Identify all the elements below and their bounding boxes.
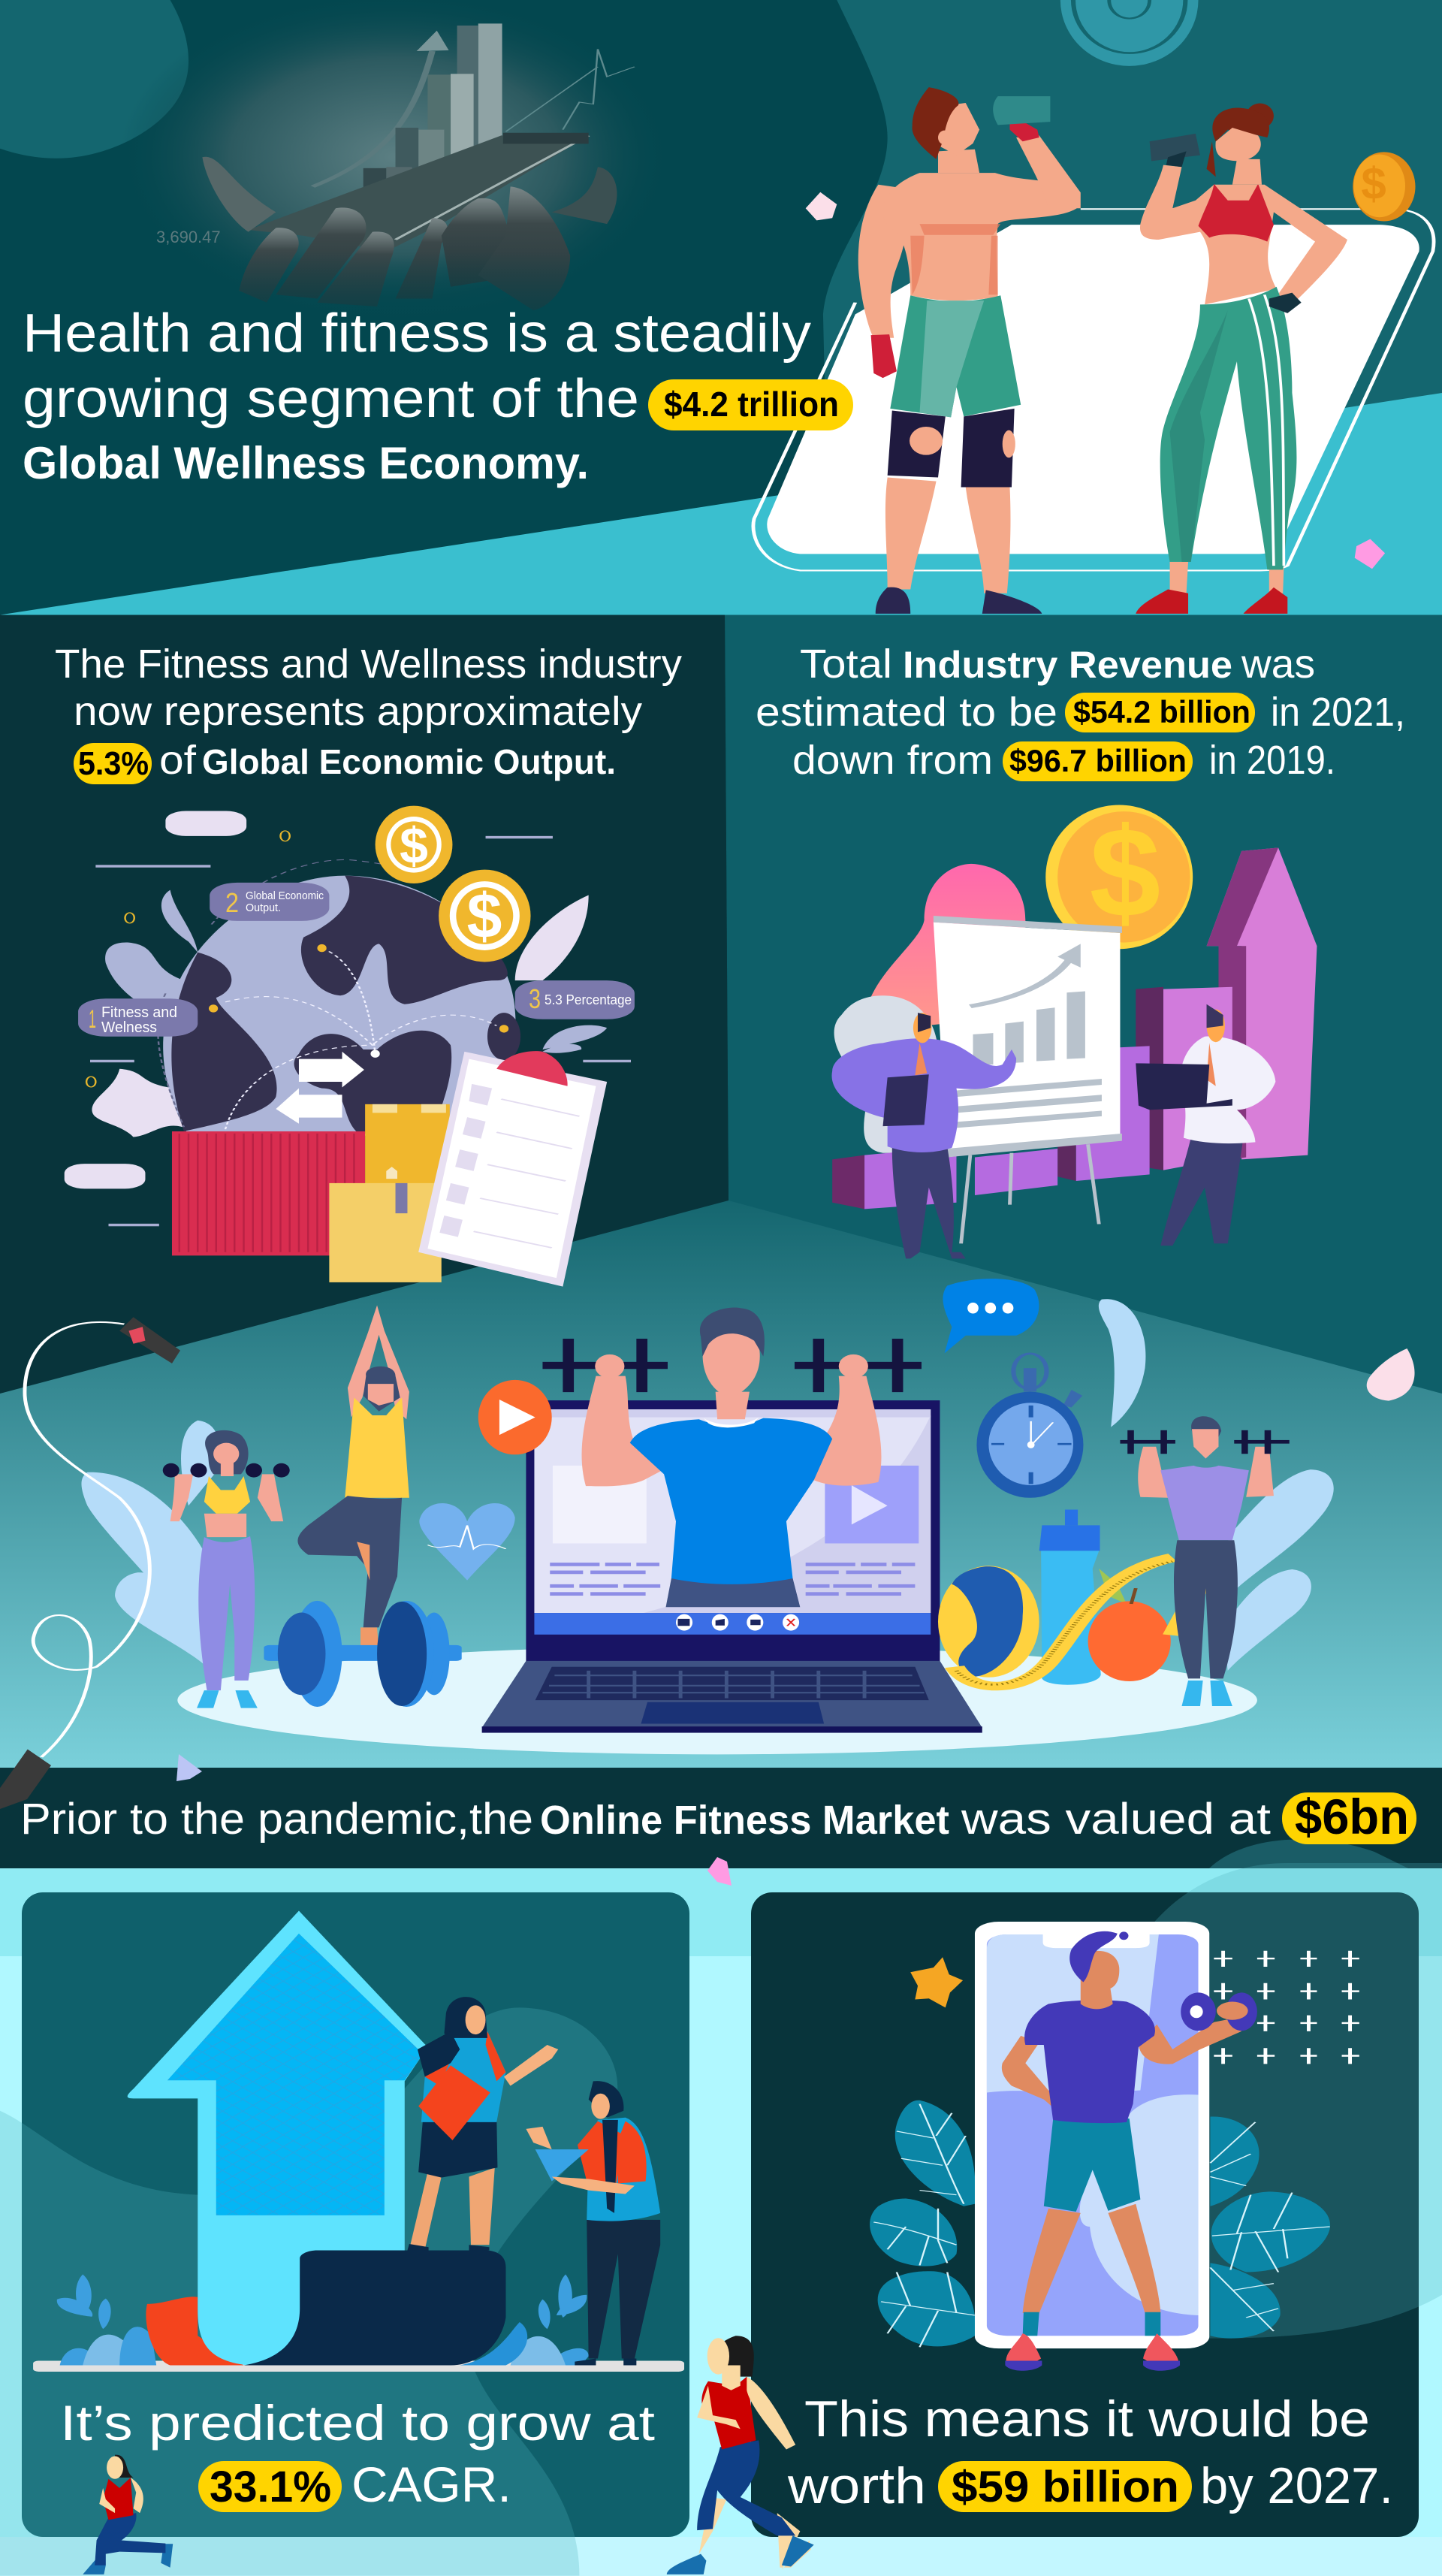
- leaf veins: [873, 2104, 1330, 2347]
- pink petal: [1367, 1348, 1415, 1401]
- value pill: 5.3%: 5.3%: [78, 745, 149, 782]
- dark teal leaves: [870, 2100, 1330, 2346]
- apple: [1088, 1569, 1171, 1681]
- left panel text: growth rate: CAGR.: [351, 2457, 511, 2512]
- pill label: fitness and wellness: Fitness and: [101, 1004, 177, 1021]
- large up arrow: [128, 1911, 427, 2366]
- pink blob: [864, 864, 1025, 1032]
- heading: global economic output: Global Economic Output.: [202, 742, 616, 781]
- cargo container: [172, 1131, 365, 1255]
- phone with athlete: [870, 1922, 1330, 2348]
- analyst with laptop: [1136, 1004, 1275, 1246]
- runner small: [83, 2455, 173, 2574]
- heading: industry revenue: was: [1241, 642, 1315, 687]
- rounded parallelogram backdrop: [753, 209, 1434, 570]
- man torso: [883, 173, 1081, 300]
- value pill: 4.2 trillion: [648, 379, 853, 430]
- man shorts: [890, 295, 1021, 417]
- woman body skin: [1140, 165, 1347, 304]
- band text: online fitness market: Online Fitness Market: [540, 1798, 949, 1843]
- left panel text: growth rate: It’s predicted to grow at: [60, 2395, 655, 2451]
- pill label: 5.3 percentage: 3: [529, 983, 541, 1014]
- pill label: global economic output: 2: [225, 887, 239, 918]
- growth illustration: [33, 1911, 1359, 2574]
- value pill: 33.1%: 33.1%: [210, 2463, 331, 2511]
- hero illustration group: [0, 0, 1442, 615]
- value pill: 6bn: $6bn: [1295, 1789, 1409, 1844]
- woman fingerless glove: [1269, 293, 1302, 313]
- pill label: fitness and wellness: [89, 1004, 177, 1036]
- man shoes: [876, 587, 1042, 614]
- right panel text: market value: worth: [787, 2457, 926, 2514]
- left panel text: growth rate: [60, 2395, 655, 2512]
- plus grid: [1214, 1951, 1359, 2064]
- dashed orbit: [158, 859, 382, 1127]
- red glove on raised hand: [1010, 114, 1039, 141]
- phone athlete: [1002, 1931, 1257, 2371]
- value pill: 96.7 billion: $96.7 billion: [1009, 743, 1187, 778]
- coin dollar signs: $: [400, 817, 428, 874]
- global output illustration: [65, 806, 635, 1287]
- right panel text: market value: This means it would be: [804, 2390, 1370, 2448]
- purple bars: [832, 987, 1232, 1209]
- hero heading: [23, 304, 853, 488]
- medicine ball: [938, 1566, 1039, 1678]
- man knee sleeves: [888, 409, 1015, 488]
- section background: top hero: [0, 0, 1442, 615]
- runner large: [667, 2336, 814, 2574]
- band text: online fitness market: Prior to the pandemic,the: [20, 1795, 533, 1844]
- man with laptop: [526, 2081, 660, 2366]
- revenue coin dollar sign: $: [1090, 802, 1160, 944]
- heading: industry revenue: Total: [800, 642, 892, 687]
- heading: industry revenue: down from: [792, 738, 993, 783]
- heading: industry revenue: in 2021,: [1271, 690, 1405, 735]
- woman with clipboard: [407, 1997, 558, 2250]
- value pill: 59 billion: $59 billion: [952, 2463, 1179, 2511]
- man raised forearm: [1016, 135, 1081, 208]
- woman feet and shins: [1170, 562, 1284, 593]
- man lower legs: [885, 477, 1010, 593]
- translucent overlay blobs: [0, 1863, 1442, 2576]
- heading: global economic output: now represents approximately: [74, 689, 642, 734]
- man abs shade: [910, 224, 1000, 294]
- water bottle: [1039, 1509, 1101, 1685]
- gold dollar coin: [1353, 152, 1416, 221]
- value pill: 54.2 billion: $54.2 billion: [1073, 694, 1250, 729]
- trainer t-shirt: [630, 1418, 832, 1584]
- decorative pills: [65, 811, 246, 1188]
- large gold coin: [1045, 805, 1193, 949]
- woman shoes: [1136, 587, 1287, 614]
- right leaf: [515, 895, 589, 980]
- online workout illustration: [0, 1279, 1415, 1810]
- stage ellipse: [177, 1646, 1257, 1754]
- value pill: 4.2 trillion: $4.2 trillion: [664, 385, 839, 424]
- label pills: [78, 883, 635, 1037]
- man drinking from bottle: [858, 87, 1081, 614]
- man left arm: [858, 185, 908, 338]
- clipboard checklist: [418, 1051, 607, 1287]
- heading: industry revenue: [756, 642, 1405, 783]
- trainer arms: [582, 1376, 881, 1486]
- trainer head: [716, 1392, 750, 1419]
- foliage cluster right: [460, 2275, 589, 2366]
- pill label: 5.3 percentage: 5.3 Percentage: [545, 992, 632, 1007]
- globe: [163, 876, 520, 1136]
- heading: global economic output: of: [159, 738, 197, 783]
- coin dollar signs: [400, 817, 502, 951]
- leaf sprig lower right: [542, 1025, 607, 1053]
- woman track pants: [1160, 287, 1296, 569]
- right panel card: [751, 1892, 1419, 2537]
- teal right background shape: [823, 0, 1442, 511]
- pill label: fitness and wellness: 1: [89, 1005, 96, 1034]
- weight plate disc: [1060, 0, 1199, 66]
- presenter in purple sweater: [832, 1013, 1016, 1258]
- jump rope: [0, 1317, 180, 1810]
- pill label: fitness and wellness: Welness: [101, 1019, 157, 1036]
- woman hair and head: [1207, 104, 1274, 185]
- crystal: pink on band: [707, 1857, 732, 1886]
- pale blue leaves: [81, 1299, 1334, 1690]
- revenue illustration: [832, 805, 1317, 1258]
- orange leaf: [146, 2297, 243, 2366]
- woman sports bra: [1199, 184, 1274, 242]
- phone body: [975, 1922, 1209, 2348]
- small lines and rings: [86, 831, 631, 1226]
- crystal: white-pink: [806, 192, 837, 220]
- section background: lower area: [0, 1868, 1442, 2576]
- left panel card: [22, 1892, 689, 2537]
- coin dollar signs: $: [467, 880, 502, 951]
- heading: industry revenue: estimated to be: [756, 690, 1057, 735]
- hero dollar sign: $: [1361, 159, 1386, 209]
- heart rate heart: [419, 1503, 515, 1581]
- jump rope handle over band: [0, 1750, 51, 1809]
- yoga pose person: [297, 1306, 409, 1651]
- heading: global economic output: [55, 642, 682, 784]
- band corner blob: [1209, 1839, 1408, 1868]
- gold star: [910, 1957, 963, 2007]
- band text: online fitness market: was valued at: [961, 1795, 1271, 1844]
- hero heading: Health and fitness is a steadily: [23, 304, 811, 364]
- dark caption band: [0, 1768, 1442, 1868]
- hero heading: Global Wellness Economy.: [23, 438, 589, 488]
- held dumbbell: [1181, 1992, 1257, 2031]
- pale blob: [834, 995, 938, 1153]
- heading: global economic output: The Fitness and Wellness industry: [55, 642, 682, 687]
- right panel text: market value: [787, 2390, 1393, 2514]
- man head and hair: [912, 87, 979, 173]
- right panel text: market value: by 2027.: [1200, 2457, 1393, 2514]
- white exchange arrows: [276, 1052, 364, 1124]
- laptop: [482, 1400, 982, 1733]
- woman with dumbbell: [1136, 104, 1347, 614]
- heading: industry revenue: in 2019.: [1209, 738, 1335, 783]
- presentation board: [934, 916, 1122, 1243]
- foliage cluster left: [57, 2275, 156, 2366]
- cyan diagonal floor: [0, 393, 1442, 615]
- hero heading: growing segment of the: [23, 369, 639, 429]
- chat bubble: [943, 1279, 1039, 1353]
- section background: middle panels and gradient: [0, 615, 1442, 1773]
- pill label: 5.3 percentage: [529, 983, 632, 1014]
- pill label: global economic output: Global Economic: [246, 889, 324, 902]
- left leaf blobs: [92, 890, 198, 1137]
- dark pedestal: [243, 2250, 505, 2366]
- crystal: periwinkle: [176, 1754, 202, 1781]
- measuring tape: [955, 1557, 1205, 1687]
- shaker bottle: [993, 96, 1050, 125]
- stopwatch: [976, 1354, 1083, 1498]
- main trainer: [542, 1307, 922, 1607]
- chart caption: 3,690.47: [156, 228, 221, 246]
- woman with dumbbells: [163, 1430, 290, 1708]
- pill label: global economic output: [225, 887, 324, 918]
- barbell dumbbell: [264, 1601, 462, 1707]
- teal corner blob: [0, 0, 189, 159]
- man wrist glove: [871, 334, 897, 378]
- play button: [478, 1380, 552, 1454]
- trainer dumbbells: [542, 1339, 922, 1392]
- gold coins: [376, 806, 531, 962]
- crystal: magenta: [1355, 539, 1385, 569]
- band text: online fitness market: [20, 1789, 1416, 1844]
- ground shelf: [33, 2360, 684, 2372]
- man with small dumbbells: [1120, 1416, 1290, 1706]
- stock chart and hands photo: [119, 0, 671, 354]
- heading: industry revenue: Industry Revenue: [903, 644, 1232, 686]
- trainer shorts: [666, 1578, 800, 1607]
- rising purple arrow: [1207, 847, 1317, 1161]
- pill label: global economic output: Output.: [246, 901, 281, 914]
- cardboard boxes: [329, 1104, 450, 1282]
- woman glove and dumbbell: [1150, 134, 1200, 161]
